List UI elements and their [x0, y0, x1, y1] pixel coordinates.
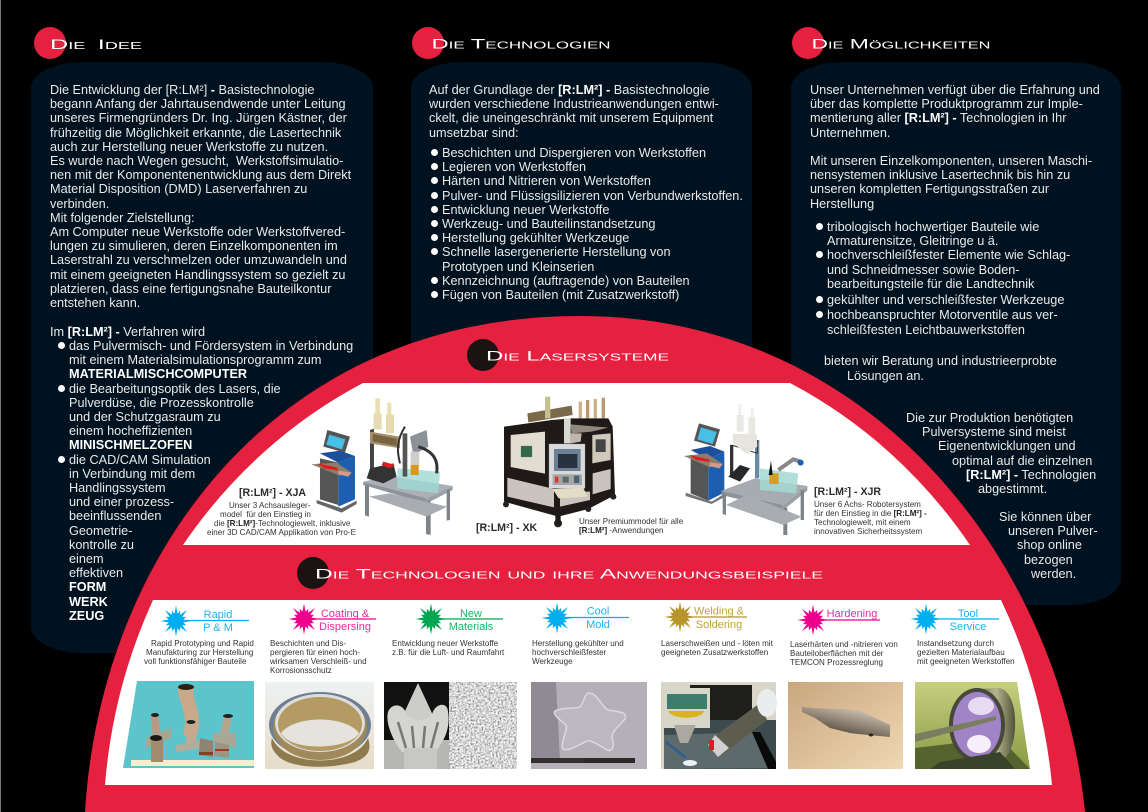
- list: Möglichkeiten bullets part one: hochverschleißfester Elemente wie Schlag-: [827, 248, 1070, 262]
- label: Coating & Dispersing: [314, 608, 376, 633]
- machine: XK: [503, 397, 616, 527]
- photo: tool service chamber: [915, 682, 1030, 769]
- heading: Die Möglichkeiten: Die Möglichkeiten: [812, 36, 990, 52]
- label: Tool Service: Tool: [958, 608, 978, 620]
- panel: Die Idee: [31, 62, 373, 653]
- text: Möglichkeiten intro: Unser Unternehmen verfügt über die Erfahrung und: [810, 83, 1100, 97]
- panel: Die Möglichkeiten: [791, 62, 1121, 605]
- text: Technologien intro: ckelt, die uneingeschränkt mit unserem Equipment: [429, 111, 713, 125]
- caption: Cool Mold: [532, 639, 624, 666]
- photo: cooled mold star: [531, 682, 647, 769]
- caption: Tool Service: mit geeigneten Werkstoffen: [917, 657, 1015, 666]
- label: Tool Service: [936, 608, 999, 633]
- caption: Tool Service: Instandsetzung durch: [917, 639, 994, 648]
- text: Technologien intro: umsetzbar sind:: [429, 126, 519, 140]
- photo: new materials sample: [384, 682, 517, 769]
- text: Pulversysteme: abgestimmt.: [978, 482, 1047, 496]
- heading: Die Idee: Die Idee: [50, 36, 143, 52]
- text: Idee intro: [50, 83, 352, 310]
- label: Hardening: Hardening: [827, 608, 877, 620]
- text: Pulvershop: [999, 510, 1098, 581]
- list: Verfahren bullets: Geometrie-: [69, 524, 132, 538]
- list: Verfahren bullets: beeinflussenden: [69, 509, 161, 523]
- heading: Die Technologien und ihre Anwendungsbeispiele: Die Technologien und ihre Anwendungsbeispiele: [315, 566, 824, 582]
- label: Welding & Soldering: [690, 606, 747, 631]
- label: New Materials: New: [460, 608, 482, 620]
- label: New Materials: Materials: [449, 621, 494, 633]
- list: Technologien bullets: Fügen von Bauteilen (mit Zusatzwerkstoff): [442, 288, 679, 302]
- text: Idee intro: Laserstrahl zu verschmelzen oder umzuwandeln und: [50, 253, 347, 267]
- text: Verfahren heading: Im [R:LM²] - Verfahren wird: [50, 325, 205, 339]
- icon: Hardening burst: [798, 604, 828, 636]
- caption: Welding: [661, 639, 773, 657]
- label: Rapid P & M: [186, 609, 249, 634]
- caption: XJR: [814, 500, 927, 536]
- text: Möglichkeiten intro: Herstellung: [810, 197, 874, 211]
- label: XJR: [R:LM²] - XJR: [814, 486, 881, 498]
- text: Idee intro: frühzeitig die Möglichkeit erkannte, die Lasertechnik: [50, 126, 341, 140]
- caption: Coating: pergieren für einen hoch-: [270, 648, 360, 657]
- label: Welding & Soldering: Soldering: [696, 619, 742, 631]
- list: Verfahren bullets: MATERIALMISCHCOMPUTER: [69, 367, 247, 381]
- list: Technologien bullets: Pulver- und Flüssigsilizieren von Verbundwerkstoffen.: [442, 189, 743, 203]
- text: Möglichkeiten intro: [810, 83, 1100, 211]
- list: Verfahren bullets: einem hocheffizienten: [69, 424, 192, 438]
- label: XJA: [R:LM²] - XJA: [239, 487, 306, 499]
- text: Idee intro: mit einem geeigneten Handlingssystem so gezielt zu: [50, 268, 346, 282]
- text: Beratung: Lösungen an.: [847, 369, 924, 383]
- caption: Cool Mold: hochverschleißfester: [532, 648, 606, 657]
- list: Verfahren bullets: und einer prozess-: [69, 495, 174, 509]
- list: Verfahren bullets: MINISCHMELZOFEN: [69, 438, 192, 452]
- list: Möglichkeiten bullets part two: schleißfesten Leichtbauwerkstoffen: [827, 323, 1025, 337]
- text: Idee intro: auch zur Herstellung neuer Werkstoffe zu nutzen.: [50, 140, 328, 154]
- text: Pulversysteme: optimal auf die einzelnen: [952, 454, 1092, 468]
- icon: Coating burst: [288, 604, 320, 634]
- caption: Rapid: Rapid Prototyping und Rapid: [151, 639, 254, 648]
- text: Pulvershop: unseren Pulver-: [1008, 524, 1098, 538]
- caption: XK: [R:LM²] -Anwendungen: [579, 526, 664, 535]
- caption: Tool Service: gezielten Materialaufbau: [917, 648, 1005, 657]
- caption: Rapid: Manufakturing zur Herstellung: [146, 648, 253, 657]
- caption: Coating: Beschichten und Dis-: [270, 639, 346, 648]
- text: Idee intro: Am Computer neue Werkstoffe oder Werkstoffvered-: [50, 225, 345, 239]
- text: Möglichkeiten intro: unseren kompletten Fertigungsstraßen zur: [810, 182, 1049, 196]
- panel: application examples white area: [105, 600, 1052, 785]
- photo: rapid prototyping parts: [123, 681, 254, 768]
- caption: Cool Mold: Werkzeuge: [532, 657, 573, 666]
- panel: laser systems white area: [183, 383, 970, 545]
- caption: XK: Unser Premiummodel für alle: [579, 517, 683, 526]
- label: Cool Mold: Cool: [587, 606, 609, 618]
- text: Möglichkeiten intro: über das komplette Produktprogramm zur Imple-: [810, 97, 1083, 111]
- photo: hardened shaft: [788, 682, 903, 769]
- caption: Hardening: Bauteiloberflächen mit der: [790, 649, 884, 658]
- list: Verfahren bullets: und der Schutzgasraum zu: [69, 410, 221, 424]
- caption: XJA: Unser 3 Achsausleger-: [229, 501, 310, 510]
- caption: XJR: für den Einstieg in die [R:LM²] -: [814, 509, 927, 518]
- list: Technologien bullets: Herstellung gekühlter Werkzeuge: [442, 231, 629, 245]
- label: Cool Mold: [567, 606, 629, 631]
- text: Idee intro: lungen zu simulieren, deren Einzelkomponenten im: [50, 239, 338, 253]
- text: Idee intro: begann Anfang der Jahrtausendwende unter Leitung: [50, 97, 346, 111]
- text: Technologien intro: wurden verschiedene Industrieanwendungen entwi-: [429, 97, 719, 111]
- icon: Welding burst: [664, 602, 696, 632]
- caption: XJR: innovativen Sicherheitssystem: [814, 527, 922, 536]
- photo: welding head: [661, 682, 777, 769]
- text: Technologien intro: [429, 83, 719, 140]
- list: Verfahren bullets: ZEUG: [69, 609, 104, 623]
- text: Idee intro: entstehen kann.: [50, 296, 140, 310]
- text: Pulvershop: bezogen: [1024, 553, 1073, 567]
- text: Möglichkeiten intro: Mit unseren Einzelkomponenten, unseren Maschi-: [810, 154, 1092, 168]
- machine: XJR: [684, 404, 807, 535]
- caption: Cool Mold: Herstellung gekühlter und: [532, 639, 624, 648]
- caption: XJA: die [R:LM²]-Technologiewelt, inklusive: [214, 519, 350, 528]
- text: Idee intro: verbinden.: [50, 197, 109, 211]
- caption: XJA: model für den Einstieg in: [220, 510, 311, 519]
- list: Verfahren bullets: in Verbindung mit dem: [69, 467, 195, 481]
- caption: XJR: Unser 6 Achs- Robotersystem: [814, 500, 921, 509]
- list: Verfahren bullets: kontrolle zu: [69, 538, 134, 552]
- icon: Cool Mold burst: [542, 602, 572, 634]
- label: Rapid P & M: P & M: [203, 622, 233, 634]
- caption: Welding: geeigneten Zusatzwerkstoffen: [661, 648, 768, 657]
- list: Verfahren bullets: das Pulvermisch- und Fördersystem in Verbindung: [69, 339, 353, 353]
- text: Beratung: [824, 354, 1057, 383]
- text: Idee intro: platzieren, dass eine fertigungsnahe Bauteilkontur: [50, 282, 331, 296]
- caption: Coating: Korrosionsschutz: [270, 666, 332, 675]
- heading: Die Technologien: Die Technologien: [432, 36, 610, 52]
- list: Möglichkeiten bullets part two: gekühlter und verschleißfester Werkzeuge: [827, 293, 1064, 307]
- icon: Rapid burst: [160, 606, 192, 636]
- list: Technologien bullets: Entwicklung neuer Werkstoffe: [442, 203, 609, 217]
- list: Möglichkeiten bullets part one: Armaturensitze, Gleitringe u ä.: [827, 234, 998, 248]
- text: Pulvershop: shop online: [1017, 538, 1082, 552]
- caption: XK: [579, 517, 683, 535]
- machine: XJA: [311, 398, 453, 535]
- icon: Tool Service burst: [910, 604, 942, 634]
- text: Pulversysteme: [906, 411, 1096, 496]
- list: Verfahren bullets: die Bearbeitungsoptik des Lasers, die: [69, 382, 281, 396]
- text: Idee intro: nen mit der Komponentenentwicklung aus dem Direkt: [50, 168, 351, 182]
- caption: New Materials: [392, 639, 504, 657]
- label: XK: [R:LM²] - XK: [476, 522, 537, 534]
- caption: Coating: wirksamen Verschleiß- und: [270, 657, 367, 666]
- caption: XJA: [207, 501, 356, 537]
- text: Technologien intro: Auf der Grundlage der [R:LM²] - Basistechnologie: [429, 83, 710, 97]
- text: Idee intro: Mit folgender Zielstellung:: [50, 211, 195, 225]
- text: Pulvershop: Sie können über: [999, 510, 1091, 524]
- label: Coating & Dispersing: Coating &: [321, 608, 370, 620]
- caption: Rapid: [144, 639, 254, 666]
- list: Möglichkeiten bullets part one: und Schneidmesser sowie Boden-: [827, 263, 1020, 277]
- list: Technologien bullets: Beschichten und Dispergieren von Werkstoffen: [442, 146, 706, 160]
- heading: Die Lasersysteme: [467, 339, 670, 371]
- list: Möglichkeiten bullets part one: tribologisch hochwertiger Bauteile wie: [827, 220, 1039, 234]
- list: Möglichkeiten bullets part one: [816, 220, 1070, 291]
- list: Möglichkeiten bullets part one: bearbeitungsteile für die Landtechnik: [827, 277, 1034, 291]
- red dome: [85, 316, 1085, 812]
- caption: XJA: einer 3D CAD/CAM Applikation von Pro-E: [207, 528, 356, 537]
- caption: Welding: Laserschweißen und - löten mit: [661, 639, 773, 648]
- text: Pulversysteme: Eigenentwicklungen und: [938, 439, 1076, 453]
- caption: Coating: [270, 639, 367, 675]
- caption: Hardening: TEMCON Prozessreglung: [790, 658, 883, 667]
- caption: Rapid: voll funktionsfähiger Bauteile: [144, 657, 246, 666]
- caption: New Materials: z.B. für die Luft- und Raumfahrt: [392, 648, 504, 657]
- list: Technologien bullets: Legieren von Werkstoffen: [442, 160, 586, 174]
- label: Cool Mold: Mold: [586, 619, 610, 631]
- heading: Die Idee: [34, 27, 143, 59]
- caption: XJR: Technologiewelt, mit einem: [814, 518, 911, 527]
- text: Möglichkeiten intro: mentierung aller [R:LM²] - Technologien in Ihr: [810, 111, 1066, 125]
- caption: New Materials: Entwicklung neuer Werkstoffe: [392, 639, 498, 648]
- photo: coated ring: [265, 682, 374, 769]
- list: Verfahren bullets: die CAD/CAM Simulation: [69, 453, 211, 467]
- text: Beratung: bieten wir Beratung und industrieerprobte: [824, 354, 1057, 368]
- caption: Hardening: Laserhärten und -nitrieren von: [790, 640, 898, 649]
- list: Verfahren bullets: mit einem Materialsimulationsprogramm zum: [69, 353, 321, 367]
- icon: New Materials burst: [416, 604, 446, 634]
- list: Verfahren bullets: FORM: [69, 580, 106, 594]
- list: Technologien bullets: Kennzeichnung (auftragende) von Bauteilen: [442, 274, 690, 288]
- text: Pulversysteme: Pulversysteme sind meist: [922, 425, 1066, 439]
- list: Verfahren bullets: effektiven: [69, 566, 123, 580]
- text: Idee intro: unseres Firmengründers Dr. Ing. Jürgen Kästner, der: [50, 111, 347, 125]
- caption: Tool Service: [917, 639, 1015, 666]
- text: Idee intro: Die Entwicklung der [R:LM²] - Basistechnologie: [50, 83, 314, 97]
- text: Pulvershop: werden.: [1031, 567, 1076, 581]
- caption: Hardening: [790, 640, 898, 667]
- text: Pulversysteme: [R:LM²] - Technologien: [966, 468, 1096, 482]
- list: Technologien bullets: Werkzeug- und Bauteilinstandsetzung: [442, 217, 655, 231]
- text: Möglichkeiten intro: Unternehmen.: [810, 126, 890, 140]
- list: Technologien bullets: [431, 146, 743, 302]
- text: Idee intro: Material Disposition (DMD) Laserverfahren zu: [50, 182, 307, 196]
- label: New Materials: [441, 608, 503, 633]
- text: Idee intro: Es wurde nach Wegen gesucht, Werkstoffsimulatio-: [50, 154, 343, 168]
- text: Pulversysteme: Die zur Produktion benötigten: [906, 411, 1073, 425]
- panel: Die Technologien: [411, 62, 752, 462]
- list: Verfahren bullets: Pulverdüse, die Prozesskontrolle: [69, 396, 254, 410]
- list: Technologien bullets: Prototypen und Kleinserien: [442, 260, 594, 274]
- list: Technologien bullets: Schnelle lasergenerierte Herstellung von: [442, 245, 671, 259]
- heading: Die Technologien: [412, 27, 610, 59]
- heading: Die Lasersysteme: Die Lasersysteme: [486, 348, 670, 364]
- list: Verfahren bullets: Handlingssystem: [69, 481, 166, 495]
- list: Technologien bullets: Härten und Nitrieren von Werkstoffen: [442, 174, 651, 188]
- heading: Die Möglichkeiten: [792, 27, 990, 59]
- label: Coating & Dispersing: Dispersing: [319, 621, 371, 633]
- list: Verfahren bullets: [58, 339, 353, 623]
- list: Verfahren bullets: WERK: [69, 595, 108, 609]
- list: Möglichkeiten bullets part two: hochbeanspruchter Motorventile aus ver-: [827, 308, 1058, 322]
- label: Welding & Soldering: Welding &: [694, 606, 745, 618]
- label: Rapid P & M: Rapid: [204, 609, 232, 621]
- label: Tool Service: Service: [950, 621, 986, 633]
- list: Verfahren bullets: einem: [69, 552, 104, 566]
- list: Möglichkeiten bullets part two: [816, 293, 1064, 337]
- text: Möglichkeiten intro: nensystemen inklusive Lasertechnik bis hin zu: [810, 168, 1070, 182]
- heading: Die Technologien und ihre Anwendungsbeispiele: [297, 557, 824, 589]
